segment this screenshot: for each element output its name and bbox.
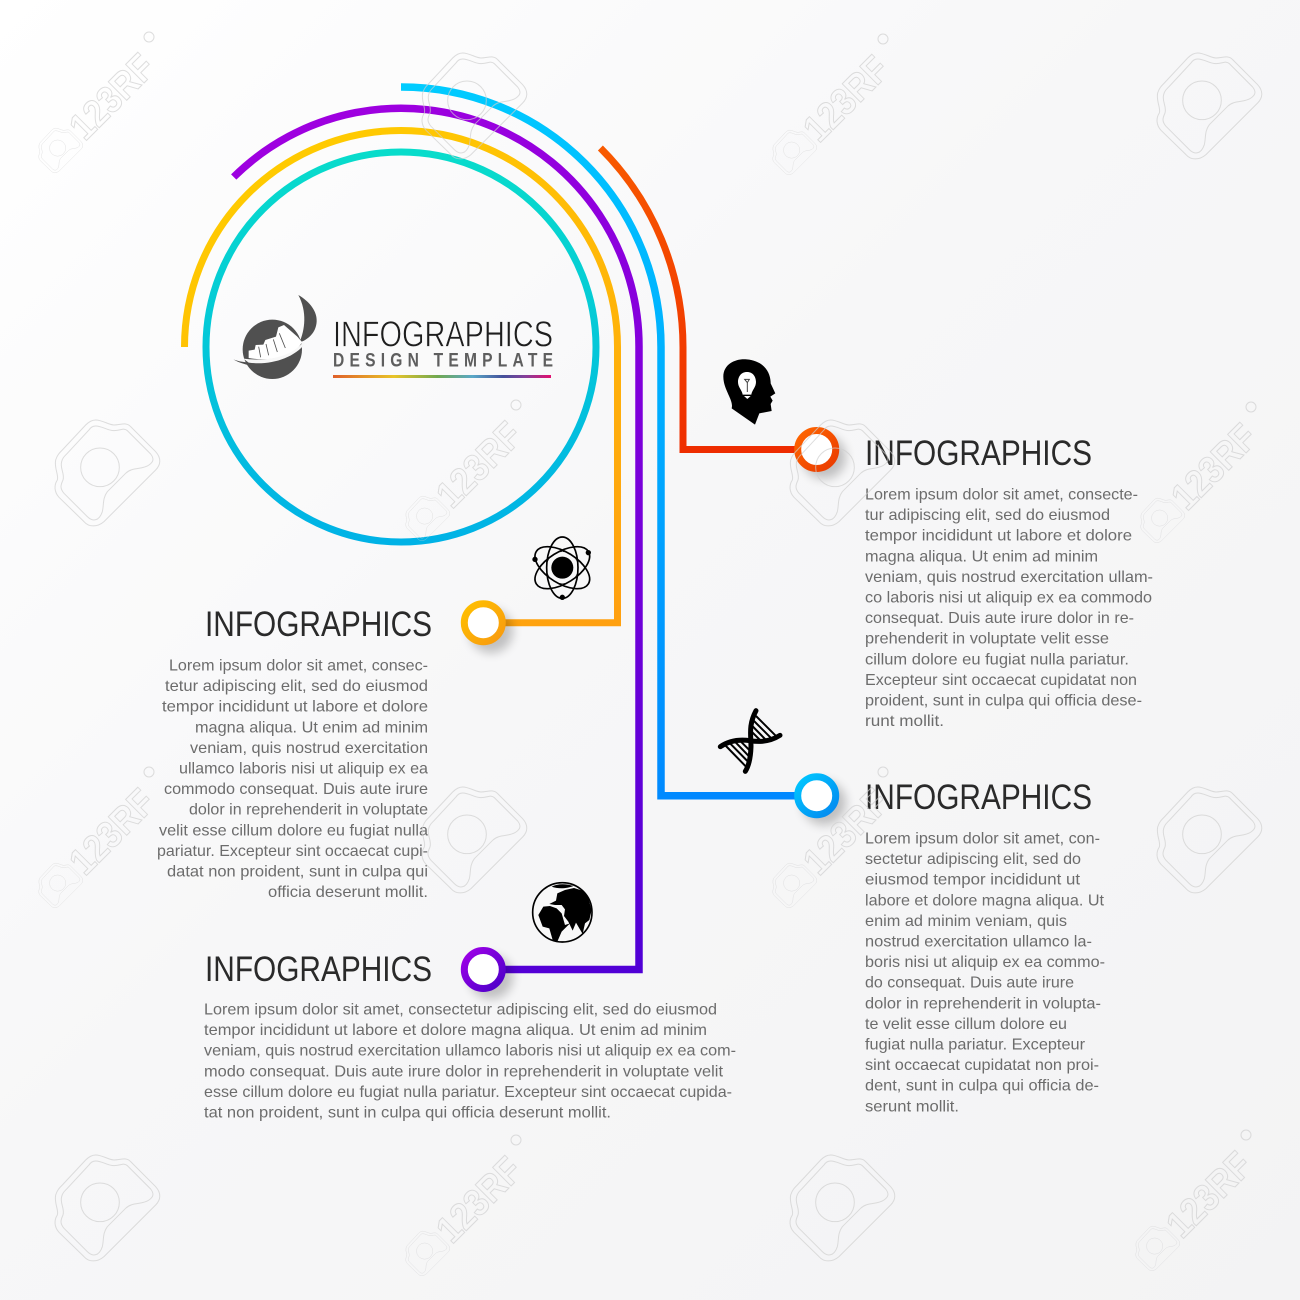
body: step three: dolor in reprehenderit in volupta-: [865, 995, 1101, 1012]
heading: step one: INFOGRAPHICS: [865, 434, 1092, 473]
node: blue: [798, 777, 846, 825]
heading: step four: INFOGRAPHICS: [205, 950, 432, 989]
logo subtitle: DESIGN TEMPLATE: [333, 349, 553, 371]
body: step one: magna aliqua. Ut enim ad minim: [865, 548, 1098, 565]
body: step two: veniam, quis nostrud exercitation: [190, 740, 428, 757]
body: step two: datat non proident, sunt in culpa qui: [167, 864, 428, 880]
body: step four: tempor incididunt ut labore et dolore magna aliqua. Ut enim ad minim: [204, 1022, 707, 1039]
body: step two: commodo consequat. Duis aute irure: [164, 781, 428, 798]
watermark layer: 123RF: [1159, 1145, 1260, 1246]
body: step two: velit esse cillum dolore eu fugiat nulla: [159, 822, 428, 839]
yellow path to step two: [184, 131, 618, 623]
body: step three: eiusmod tempor incididunt ut: [865, 872, 1081, 889]
body: step two: ullamco laboris nisi ut aliquip ex ea: [179, 760, 428, 778]
body: step one: proident, sunt in culpa qui officia dese-: [865, 692, 1142, 710]
watermark layer: 123RF: [429, 415, 530, 516]
body: step one: [865, 486, 1153, 730]
body: step three: fugiat nulla pariatur. Excepteur: [865, 1036, 1086, 1054]
body: step two: [157, 658, 428, 901]
body: step one: tur adipiscing elit, sed do eiusmod: [865, 507, 1110, 524]
body: step three: te velit esse cillum dolore eu: [865, 1016, 1067, 1033]
body: step four: esse cillum dolore eu fugiat nulla pariatur. Excepteur sint occaecat cupida-: [204, 1084, 732, 1101]
panel: step two text: [157, 605, 432, 901]
body: step two: dolor in reprehenderit in voluptate: [189, 802, 428, 819]
body: step one: consequat. Duis aute irure dolor in re-: [865, 610, 1134, 627]
watermark layer: 123RF: [1164, 417, 1265, 518]
body: step four: veniam, quis nostrud exercitation ullamco laboris nisi ut aliquip ex ea com-: [204, 1043, 736, 1060]
body: step two: officia deserunt mollit.: [268, 884, 428, 901]
body: step one: cillum dolore eu fugiat nulla pariatur.: [865, 651, 1129, 668]
body: step two: pariatur. Excepteur sint occaecat cupi-: [157, 843, 428, 860]
body: step one: Lorem ipsum dolor sit amet, consecte-: [865, 486, 1138, 504]
body: step four: [204, 1002, 736, 1122]
body: step one: tempor incididunt ut labore et dolore: [865, 528, 1132, 545]
body: step three: do consequat. Duis aute irure: [865, 975, 1074, 992]
panel: step three text: [865, 778, 1105, 1115]
watermark layer: 123RF: [796, 49, 897, 150]
body: step four: Lorem ipsum dolor sit amet, consectetur adipiscing elit, sed do eiusmod: [204, 1002, 717, 1018]
body: step one: runt mollit.: [865, 713, 944, 730]
watermark layer: 123RF: [62, 47, 163, 148]
body: step four: tat non proident, sunt in culpa qui officia deserunt mollit.: [204, 1104, 611, 1122]
body: step three: nostrud exercitation ullamco la-: [865, 934, 1092, 950]
body: step three: [865, 830, 1105, 1115]
body: step one: Excepteur sint occaecat cupidatat non: [865, 672, 1137, 689]
watermark layer: 123RF: [796, 782, 897, 883]
rainbow underline: [333, 375, 551, 378]
purple path to step four: [234, 108, 639, 969]
node: orange: [798, 430, 846, 479]
watermark layer: 123RF: [429, 1150, 530, 1251]
heading: step two: INFOGRAPHICS: [205, 605, 432, 644]
body: step three: boris nisi ut aliquip ex ea commo-: [865, 954, 1105, 971]
node: yellow: [464, 604, 513, 653]
body: step two: magna aliqua. Ut enim ad minim: [195, 719, 428, 736]
body: step two: Lorem ipsum dolor sit amet, consec-: [169, 658, 428, 674]
body: step four: modo consequat. Duis aute irure dolor in reprehenderit in voluptate velit: [204, 1063, 724, 1080]
icon: head with light bulb: [723, 359, 775, 425]
panel: step four text: [204, 950, 736, 1122]
body: step one: prehenderit in voluptate velit esse: [865, 631, 1109, 648]
central logo: [233, 295, 553, 379]
blue path to step three: [401, 87, 810, 796]
body: step three: labore et dolore magna aliqua. Ut: [865, 892, 1105, 909]
icon: DNA helix: [720, 711, 780, 771]
watermark layer: 123RF: [62, 782, 163, 883]
body: step two: tetur adipiscing elit, sed do eiusmod: [165, 678, 428, 695]
body: step one: co laboris nisi ut aliquip ex ea commodo: [865, 590, 1152, 606]
logo title: INFOGRAPHICS: [333, 314, 553, 354]
body: step three: dent, sunt in culpa qui officia de-: [865, 1078, 1099, 1095]
body: step one: veniam, quis nostrud exercitation ullam-: [865, 569, 1153, 586]
body: step three: enim ad minim veniam, quis: [865, 913, 1067, 930]
body: step two: tempor incididunt ut labore et dolore: [162, 699, 428, 716]
teal centre ring: [206, 152, 596, 542]
body: step three: serunt mollit.: [865, 1098, 959, 1115]
heading: step three: INFOGRAPHICS: [865, 778, 1092, 817]
icon: globe: [533, 883, 592, 942]
body: step three: sectetur adipiscing elit, sed do: [865, 851, 1081, 868]
logo mark: football and swoosh: [233, 295, 317, 379]
body: step three: sint occaecat cupidatat non proi-: [865, 1057, 1099, 1074]
panel: step one text: [865, 434, 1153, 730]
node: purple: [464, 950, 513, 999]
icon: atom: [528, 537, 597, 600]
body: step three: Lorem ipsum dolor sit amet, con-: [865, 830, 1100, 848]
orange path to step one: [600, 148, 810, 450]
